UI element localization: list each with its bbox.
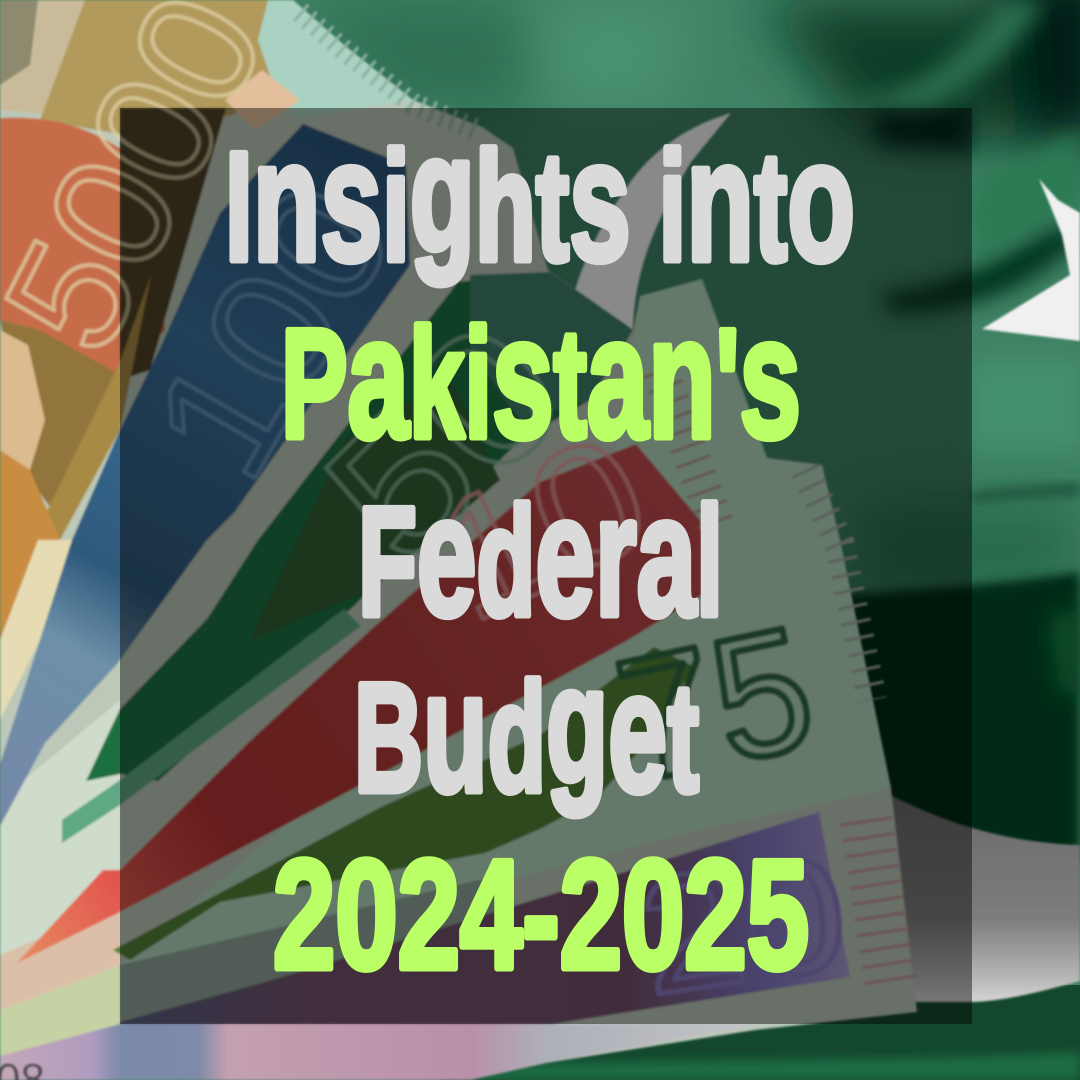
banknote: olive 75 [113, 590, 829, 960]
title [225, 101, 855, 1001]
note pale green body [120, 279, 891, 965]
title line: Federal: Federal [358, 460, 723, 652]
title line: Insights into: ht [475, 120, 569, 293]
note margin ticks [300, 12, 891, 985]
banknote: purple 20 [0, 812, 858, 1080]
title line: Insights into: g [410, 101, 475, 285]
icon: flag star [982, 179, 1080, 341]
title line: Insights into: Insi [225, 105, 453, 297]
title line: Pakistan's: Pakistan's [281, 282, 801, 474]
title line: Budget: Bud [354, 636, 582, 828]
mint note margin [240, 0, 413, 118]
flag dark crease line [972, 482, 1080, 504]
dark overlay panel [120, 108, 972, 1024]
banknote: blue 100 [0, 124, 430, 826]
banknote: green 50 [62, 272, 633, 843]
title line: Budget: e [608, 636, 667, 828]
left pale area [0, 700, 120, 1040]
banknote: purple 20: 20 [629, 819, 858, 1030]
banknote: orange 5000 [0, 0, 300, 720]
banknote: green 50: 50 [285, 282, 605, 602]
title line: 2024-2025: 2024-2025 [273, 828, 809, 1001]
icon: flag crescent [565, 113, 731, 340]
title line: Budget: g [546, 632, 608, 816]
title line: Insights into: s into [569, 105, 892, 297]
flag shadow highlight [1050, 605, 1080, 700]
flag bottom band [440, 985, 1080, 1080]
banknote: red 10: 10 [405, 398, 676, 659]
flag white stripe [860, 790, 1080, 1002]
title line: Budget: t [667, 651, 719, 824]
flag deep shadow [830, 572, 1080, 860]
banknote: blue 100: 100 [115, 154, 430, 508]
banknote: olive 75: 75 [602, 590, 829, 820]
